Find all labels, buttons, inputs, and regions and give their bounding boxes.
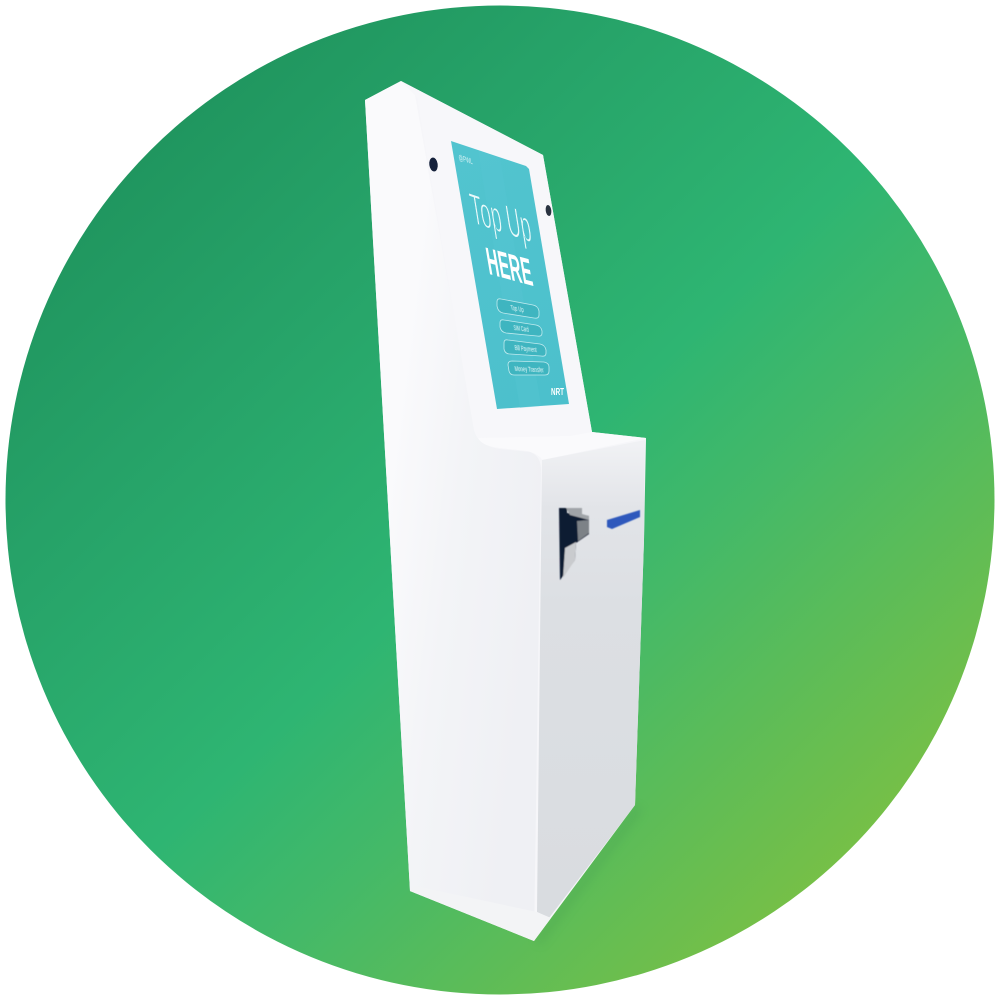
button: SIM Card <box>500 320 542 336</box>
upper head panel <box>401 81 600 448</box>
screen: HERE <box>483 240 535 295</box>
button: Bill Payment <box>504 340 546 356</box>
screen stripes <box>478 150 541 408</box>
bottom corner highlight <box>410 886 551 941</box>
screen panel <box>451 141 569 409</box>
side panel <box>537 440 645 918</box>
printer dark frame <box>559 508 589 580</box>
camera right <box>545 205 552 216</box>
front face <box>365 81 541 941</box>
button: Top Up: Top Up <box>510 304 524 314</box>
camera left <box>428 157 439 172</box>
button: Top Up <box>497 299 539 318</box>
printer middle metal <box>577 520 589 541</box>
NRT logo: NRT <box>551 387 564 398</box>
button: Bill Payment: Bill Payment <box>514 345 537 354</box>
ledge top <box>478 432 646 460</box>
kiosk shadow <box>536 806 642 945</box>
screen <box>451 141 569 409</box>
receipt printer <box>559 508 589 580</box>
printer lower paper <box>563 542 576 578</box>
brand logo: @PWL <box>458 153 474 166</box>
button: SIM Card: SIM Card <box>513 325 529 334</box>
button: Money Transfer: Money Transfer <box>514 366 545 374</box>
kiosk body outline <box>365 81 646 941</box>
screen: Top Up <box>467 183 535 252</box>
printer upper metal <box>566 508 589 520</box>
blue card reader <box>607 510 640 529</box>
kiosk <box>365 81 646 941</box>
button: Money Transfer <box>508 361 549 375</box>
